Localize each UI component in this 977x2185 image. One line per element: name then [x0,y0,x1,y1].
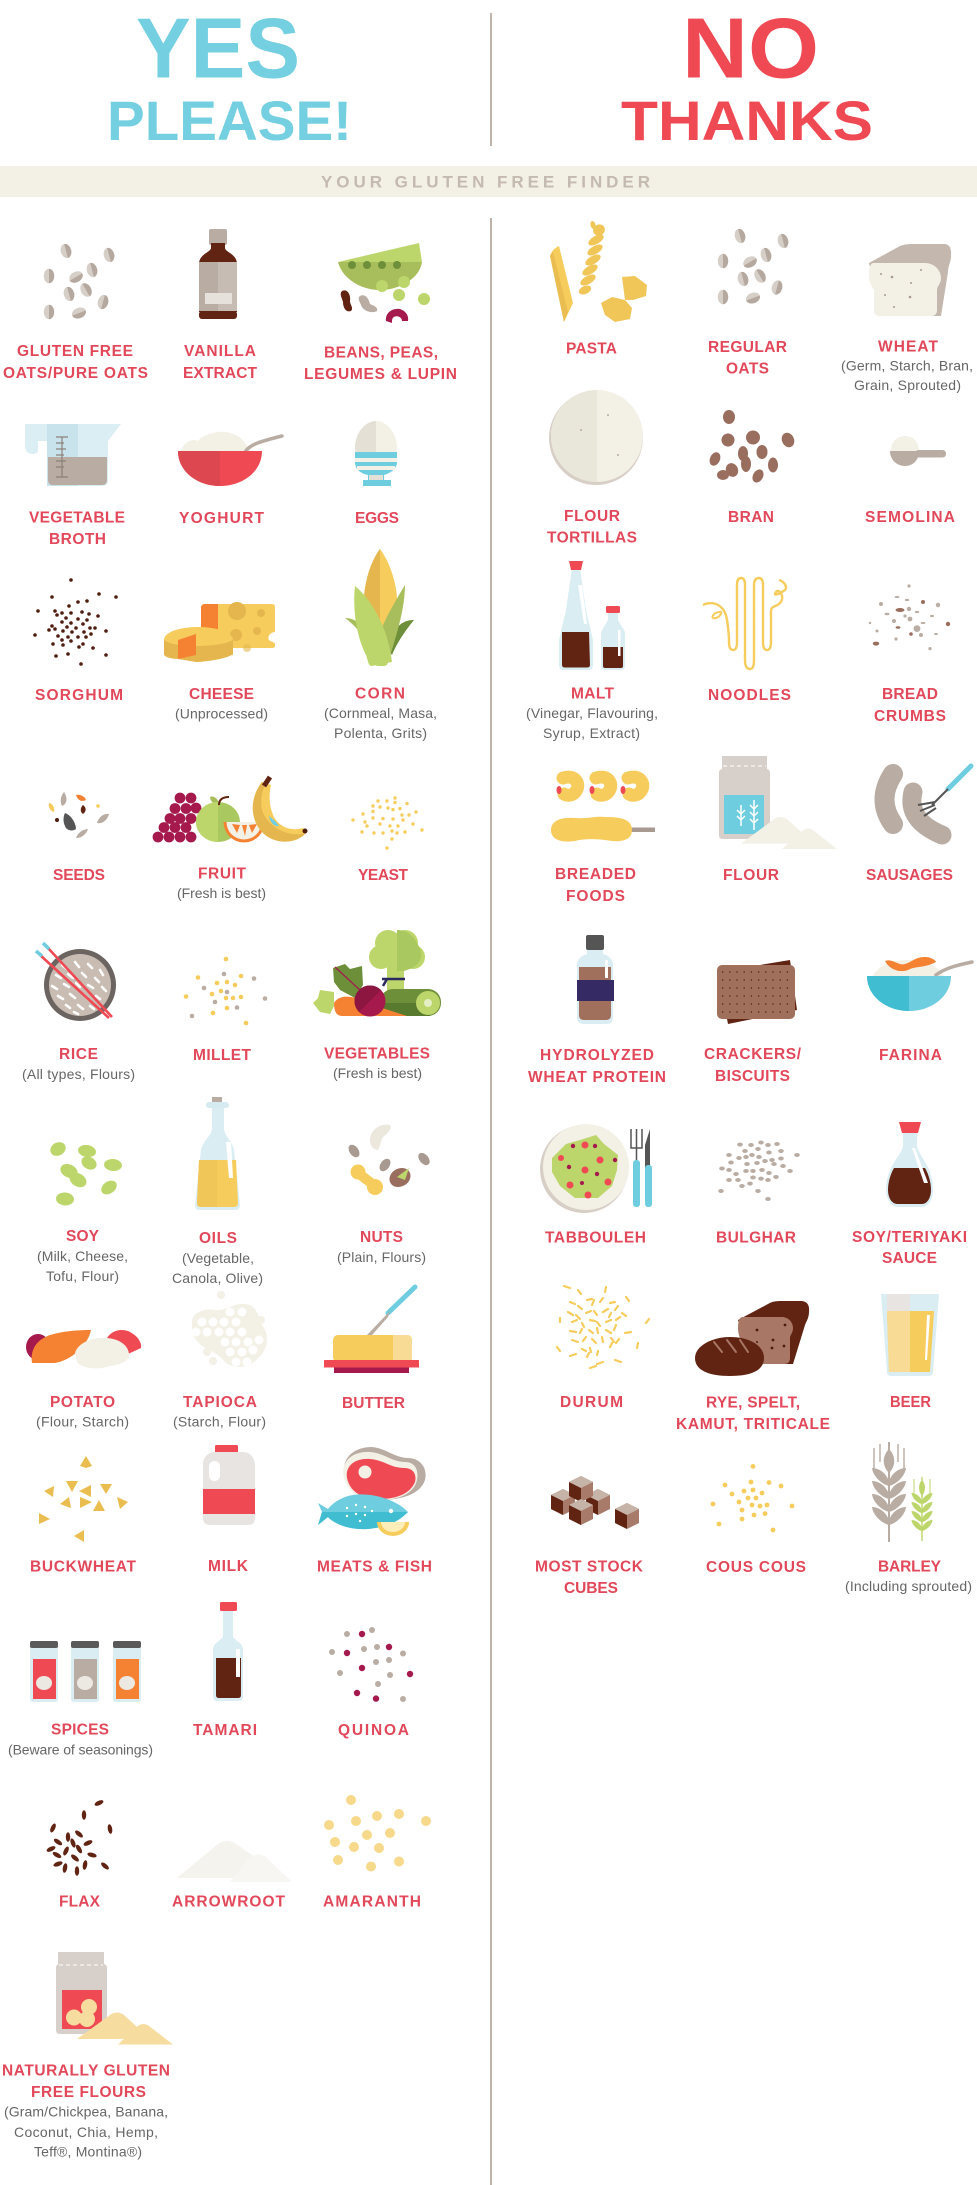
item: rice [22,943,135,1082]
item: vanilla extract: EXTRACT [183,365,258,382]
item: breaded foods: BREADED [555,866,636,883]
item: farina [867,957,972,1064]
item: malt: MALT [571,686,615,702]
item: corn: Polenta, Grits) [334,725,427,741]
panel: yes foods [2,229,457,2160]
icon: vegetable pile [313,930,441,1016]
item: rice: RICE [59,1046,98,1063]
icon: soy sauce bottle [886,1122,933,1207]
icon: spice jars [30,1641,141,1702]
item: most stock cubes: MOST STOCK [535,1558,644,1576]
item: potato: POTATO [50,1394,115,1411]
item: cous cous: COUS COUS [706,1559,806,1576]
icon: quinoa seeds [329,1627,413,1702]
item: tapioca [173,1291,267,1430]
item: cheese [164,602,275,722]
item: naturally gluten free flours: (Gram/Chickpea, Banana, [4,2104,168,2120]
item: gluten free oats: OATS/PURE OATS [3,365,148,382]
item: soy teriyaki sauce: SOY/TERIYAKI [852,1229,967,1246]
item: soy teriyaki sauce: SAUCE [882,1250,937,1267]
item: semolina [865,436,955,526]
item: vegetables [313,930,441,1081]
icon: milk jug [203,1445,255,1525]
item: naturally gluten free flours: NATURALLY GLUTEN [2,2062,170,2080]
icon: amaranth seeds [324,1795,431,1872]
icon: vanilla bottle [199,229,237,319]
title: yes please [107,2,352,152]
item: vanilla extract: VANILLA [184,343,256,360]
item: flour tortillas [547,390,643,546]
item: cheese: CHEESE [189,686,254,703]
item: bread crumbs [869,584,950,725]
item: spices: SPICES [51,1722,109,1739]
item: yoghurt [178,432,282,527]
item: most stock cubes: CUBES [564,1580,618,1597]
item: wheat: (Germ, Starch, Bran, [841,358,973,374]
item: amaranth [323,1795,431,1910]
icon: assorted seeds [49,792,109,838]
item: soy teriyaki sauce [852,1122,967,1267]
item: nuts: (Plain, Flours) [337,1249,426,1265]
panel: no foods [526,220,973,1597]
item: quinoa: QUINOA [338,1722,409,1739]
icon: bread loaf [869,244,951,316]
item: milk [203,1445,255,1575]
icon: steak fish lemon [318,1447,426,1536]
item: noodles: NOODLES [708,687,791,704]
icon: farina bowl [867,957,972,1011]
icon: tamari bottle [213,1602,243,1701]
item: eggs [355,421,399,527]
item: wheat [841,244,973,393]
icon: oats [718,228,790,305]
icon: salad plate and cutlery [540,1124,652,1213]
icon: barley stalks [872,1442,933,1542]
item: tabbouleh: TABBOULEH [545,1230,646,1246]
item: bulghar: BULGHAR [716,1230,796,1246]
item: tapioca: (Starch, Flour) [173,1414,266,1430]
icon: bran flakes [708,410,797,485]
item: barley: BARLEY [878,1558,942,1576]
item: breaded foods [551,777,655,905]
item: oils: OILS [199,1230,237,1247]
item: spices [8,1641,153,1757]
icon: bulghar grains [718,1140,800,1201]
item: rye spelt kamut triticale [676,1301,830,1433]
icon: flour bag and pile [719,756,837,849]
item: beans peas [304,243,457,383]
title: yes please: PLEASE! [107,89,352,152]
item: soy: Tofu, Flour) [46,1268,119,1284]
item: regular oats: OATS [726,360,769,378]
item: vegetable broth: VEGETABLE [29,510,125,526]
icon: flour bag with bananas [56,1952,173,2044]
icon: egg in cup [355,421,397,486]
item: rye spelt kamut triticale: RYE, SPELT, [706,1394,800,1412]
item: soy [37,1139,128,1284]
item: naturally gluten free flours: FREE FLOURS [31,2084,146,2101]
banner: your gluten free finder [0,166,977,197]
item: naturally gluten free flours: Teff®, Montina®) [34,2144,142,2160]
item: meats and fish: MEATS & FISH [317,1558,432,1576]
item: nuts [337,1125,432,1265]
item: oils: (Vegetable, [182,1250,254,1266]
icon: arrowroot powder [177,1841,292,1882]
item: rice: (All types, Flours) [22,1066,135,1082]
item: bread crumbs: CRUMBS [874,708,946,725]
title: yes please: YES [136,2,300,96]
item: hydrolyzed wheat protein [528,935,666,1086]
item: yeast [351,796,424,884]
icon: noodle strand [703,578,786,669]
item: yeast: YEAST [358,867,409,884]
icon: cous cous dots [711,1464,794,1532]
item: fruit: (Fresh is best) [177,885,266,901]
item: fruit: FRUIT [198,866,247,882]
title: no thanks [621,2,873,152]
item: barley [845,1442,972,1594]
item: nuts: NUTS [360,1229,403,1246]
item: yoghurt: YOGHURT [179,510,265,527]
item: corn: CORN [355,686,405,702]
item: oils [172,1097,263,1286]
item: barley: (Including sprouted) [845,1578,972,1594]
item: flax: FLAX [59,1894,101,1910]
item: regular oats: REGULAR [708,339,787,356]
item: rye spelt kamut triticale: KAMUT, TRITICALE [676,1416,830,1433]
item: arrowroot [172,1841,292,1910]
item: buckwheat: BUCKWHEAT [30,1558,137,1576]
item: vegetables: VEGETABLES [324,1046,430,1062]
icon: sausages and fork [884,766,971,835]
icon: grapes apple orange banana [153,777,308,842]
icon: tapioca pearls [192,1291,267,1367]
icon: protein bottle [577,935,614,1024]
icon: measuring cup [25,424,121,486]
item: semolina: SEMOLINA [865,509,955,526]
item: sausages: SAUSAGES [866,867,953,884]
item: flour [719,756,837,884]
icon: sorghum dots [33,578,118,666]
icon: crumbs [869,584,950,650]
item: arrowroot: ARROWROOT [172,1894,286,1910]
icon: buckwheat kernels [39,1456,128,1542]
item: flour tortillas: FLOUR [564,508,620,525]
banner: your gluten free finder: YOUR GLUTEN FREE FINDER [321,172,650,192]
icon: crackers [717,960,797,1024]
item: cheese: (Unprocessed) [175,706,268,722]
item: quinoa [329,1627,413,1739]
icon: corn cob [345,549,414,666]
item: cous cous [706,1464,806,1576]
item: gluten free oats: GLUTEN FREE [17,343,133,360]
icon: dark bread [695,1301,809,1376]
icon: pasta shapes [550,220,647,322]
icon: oil bottle [195,1097,240,1210]
icon: malt bottles [559,561,625,670]
item: beans peas: BEANS, PEAS, [324,344,438,362]
item: tamari: TAMARI [193,1722,257,1739]
icon: soy beans [48,1139,122,1206]
title: no thanks: NO [682,2,819,96]
item: seeds [49,792,109,884]
item: amaranth: AMARANTH [323,1894,421,1910]
item: flour: FLOUR [723,867,779,884]
item: malt: (Vinegar, Flavouring, [526,705,658,721]
item: meats and fish [317,1447,432,1576]
item: hydrolyzed wheat protein: WHEAT PROTEIN [528,1069,666,1086]
item: spices: (Beware of seasonings) [8,1741,153,1757]
item: potato: (Flour, Starch) [36,1414,129,1430]
item: farina: FARINA [879,1047,942,1064]
icon: cheese block and wheel [164,602,275,662]
item: soy: SOY [66,1228,100,1245]
icon: rice bowl and chopsticks [36,943,116,1021]
item: breaded foods: FOODS [566,888,625,905]
icon: beer glass [881,1294,939,1376]
item: malt: Syrup, Extract) [543,725,640,741]
icon: yeast dots [351,796,424,850]
item: vegetables: (Fresh is best) [333,1065,422,1081]
item: malt [526,561,658,741]
item: wheat: WHEAT [878,338,939,356]
item: naturally gluten free flours: Coconut, Chia, Hemp, [14,2124,158,2140]
item: bread crumbs: BREAD [882,686,938,703]
item: beer: BEER [890,1394,931,1411]
icon: semolina scoop [890,436,946,466]
item: durum: DURUM [560,1394,623,1411]
icon: potatoes [26,1330,141,1368]
item: beans peas: LEGUMES & LUPIN [304,366,457,383]
icon: butter with knife [324,1287,419,1373]
item: corn [324,549,437,741]
item: fruit [153,777,308,901]
icon: oats [44,243,116,320]
item: most stock cubes [535,1476,644,1597]
item: crackers [704,960,802,1085]
item: butter: BUTTER [342,1395,405,1412]
item: millet [184,957,267,1064]
item: butter [324,1287,419,1412]
item: pasta: PASTA [566,340,617,358]
item: tabbouleh [540,1124,652,1246]
item: naturally gluten free flours [2,1952,173,2160]
icon: yoghurt bowl [178,432,282,486]
icon: breaded shrimp and corn dog [551,777,655,842]
icon: durum grains [557,1286,649,1368]
icon: mixed nuts [346,1125,432,1195]
item: noodles [703,578,791,704]
item: sausages [866,766,971,884]
icon: pea pod and beans [338,243,430,323]
title: no thanks: THANKS [621,89,873,152]
item: sorghum [33,578,123,704]
item: beer [881,1294,939,1411]
item: vegetable broth [25,424,125,548]
item: soy: (Milk, Cheese, [37,1248,128,1264]
icon: flax seeds [46,1799,113,1876]
item: flax [46,1799,113,1910]
item: crackers: BISCUITS [715,1068,790,1085]
item: sorghum: SORGHUM [35,687,123,704]
icon: stock cubes [551,1476,639,1529]
item: bran: BRAN [728,509,774,526]
item: regular oats [708,228,790,378]
item: tamari [193,1602,257,1739]
item: wheat: Grain, Sprouted) [854,377,961,393]
item: gluten free oats [3,243,148,382]
icon: millet dots [184,957,267,1025]
item: hydrolyzed wheat protein: HYDROLYZED [540,1047,654,1064]
item: seeds: SEEDS [53,867,105,884]
item: bulghar [716,1140,800,1246]
item: vegetable broth: BROTH [49,531,106,548]
item: pasta [550,220,647,358]
item: buckwheat [30,1456,137,1576]
item: millet: MILLET [193,1047,252,1064]
item: corn: (Cornmeal, Masa, [324,705,437,721]
item: milk: MILK [208,1558,249,1575]
item: tapioca: TAPIOCA [183,1394,257,1411]
item: vanilla extract [183,229,258,382]
item: flour tortillas: TORTILLAS [547,530,637,546]
icon: tortilla [549,390,643,485]
item: potato [26,1330,141,1430]
item: durum [557,1286,649,1411]
item: eggs: EGGS [355,510,399,527]
item: crackers: CRACKERS/ [704,1046,802,1063]
item: bran [708,410,797,526]
item: oils: Canola, Olive) [172,1270,263,1286]
